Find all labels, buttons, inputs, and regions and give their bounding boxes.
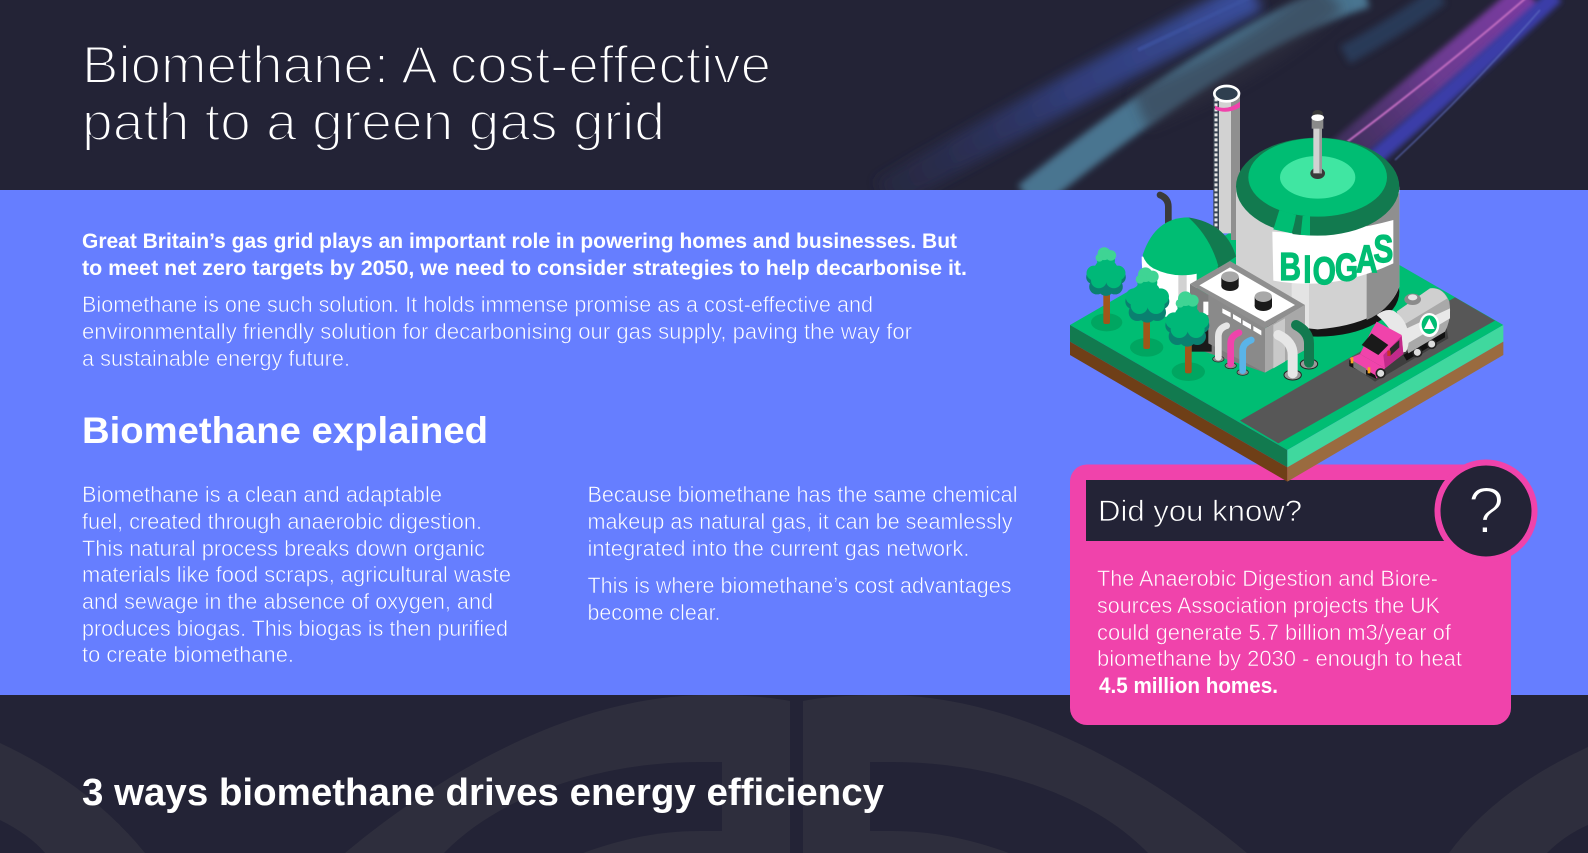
card body text: sources Association projects the UK bbox=[1097, 593, 1440, 618]
chimney bbox=[1213, 86, 1240, 240]
card heading bar bbox=[1086, 480, 1466, 541]
heading: 3 ways: 3 ways biomethane drives energy efficiency bbox=[82, 772, 884, 814]
lower dark band bbox=[0, 695, 1588, 853]
text column 2: makeup as natural gas, it can be seamlessly bbox=[588, 509, 1012, 534]
text column 2: integrated into the current gas network. bbox=[588, 536, 970, 561]
tank label band: BIOGAS bbox=[1279, 227, 1393, 293]
pipes bbox=[1213, 325, 1318, 380]
road shadow bbox=[1348, 328, 1448, 382]
text column 2: This is where biomethane’s cost advantages bbox=[588, 573, 1012, 598]
text column 1: produces biogas. This biogas is then purified bbox=[82, 616, 508, 641]
tree 2 bbox=[1125, 267, 1169, 357]
question badge: ? bbox=[1468, 473, 1504, 547]
card body text bbox=[1097, 566, 1462, 698]
intro paragraph: environmentally friendly solution for decarbonising our gas supply, paving the way for bbox=[82, 319, 912, 344]
question badge bbox=[1438, 462, 1534, 560]
background arches bbox=[0, 695, 1588, 853]
card body text: biomethane by 2030 - enough to heat bbox=[1097, 646, 1462, 671]
heading: Biomethane explained: Biomethane explained bbox=[82, 410, 488, 451]
text column 1 bbox=[82, 482, 511, 667]
intro paragraph bbox=[82, 292, 912, 371]
intro bold text: to meet net zero targets by 2050, we need to consider strategies to help decarbonise it. bbox=[82, 256, 967, 280]
text column 1: fuel, created through anaerobic digestion. bbox=[82, 509, 482, 534]
intro bold text: Great Britain’s gas grid plays an important role in powering homes and businesses. But bbox=[82, 229, 957, 253]
small dark pipe bbox=[1160, 195, 1168, 225]
intro bold text bbox=[82, 229, 967, 280]
blue content panel bbox=[0, 190, 1588, 695]
card body text: 4.5 million homes. bbox=[1099, 673, 1278, 698]
tanker bbox=[1397, 288, 1450, 353]
card heading text: Did you know? bbox=[1098, 495, 1302, 528]
platform bbox=[1070, 200, 1503, 482]
card body text: The Anaerobic Digestion and Biore- bbox=[1097, 566, 1438, 591]
cab bbox=[1360, 322, 1403, 368]
vent pole bbox=[1310, 110, 1325, 179]
did you know card bbox=[1070, 462, 1534, 725]
intro paragraph: a sustainable energy future. bbox=[82, 346, 350, 371]
header background bbox=[0, 0, 1588, 190]
text column 1: to create biomethane. bbox=[82, 642, 294, 667]
control building bbox=[1190, 261, 1305, 373]
card background bbox=[1070, 464, 1511, 725]
text column 1: Biomethane is a clean and adaptable bbox=[82, 482, 442, 507]
tree 1 bbox=[1086, 247, 1126, 331]
text column 1: and sewage in the absence of oxygen, and bbox=[82, 589, 493, 614]
text column 1: This natural process breaks down organic bbox=[82, 536, 485, 561]
text column 2 bbox=[588, 482, 1018, 625]
biogas tank bbox=[1236, 110, 1399, 337]
title: Biomethane: A cost-effective bbox=[82, 36, 771, 95]
light streaks bbox=[883, 0, 1556, 198]
truck bbox=[1348, 288, 1450, 382]
title bbox=[82, 36, 771, 152]
text column 1: materials like food scraps, agricultural waste bbox=[82, 562, 511, 587]
tree 3 bbox=[1165, 291, 1209, 381]
card body text: could generate 5.7 billion m3/year of bbox=[1097, 620, 1452, 645]
biogas plant illustration bbox=[1070, 86, 1503, 482]
text column 2: Because biomethane has the same chemical bbox=[588, 482, 1018, 507]
chassis bbox=[1403, 330, 1445, 361]
text column 2: become clear. bbox=[588, 600, 720, 625]
title: path to a green gas grid bbox=[82, 93, 665, 152]
intro paragraph: Biomethane is one such solution. It holds immense promise as a cost-effective and bbox=[82, 292, 873, 317]
small digester dome bbox=[1142, 217, 1236, 317]
